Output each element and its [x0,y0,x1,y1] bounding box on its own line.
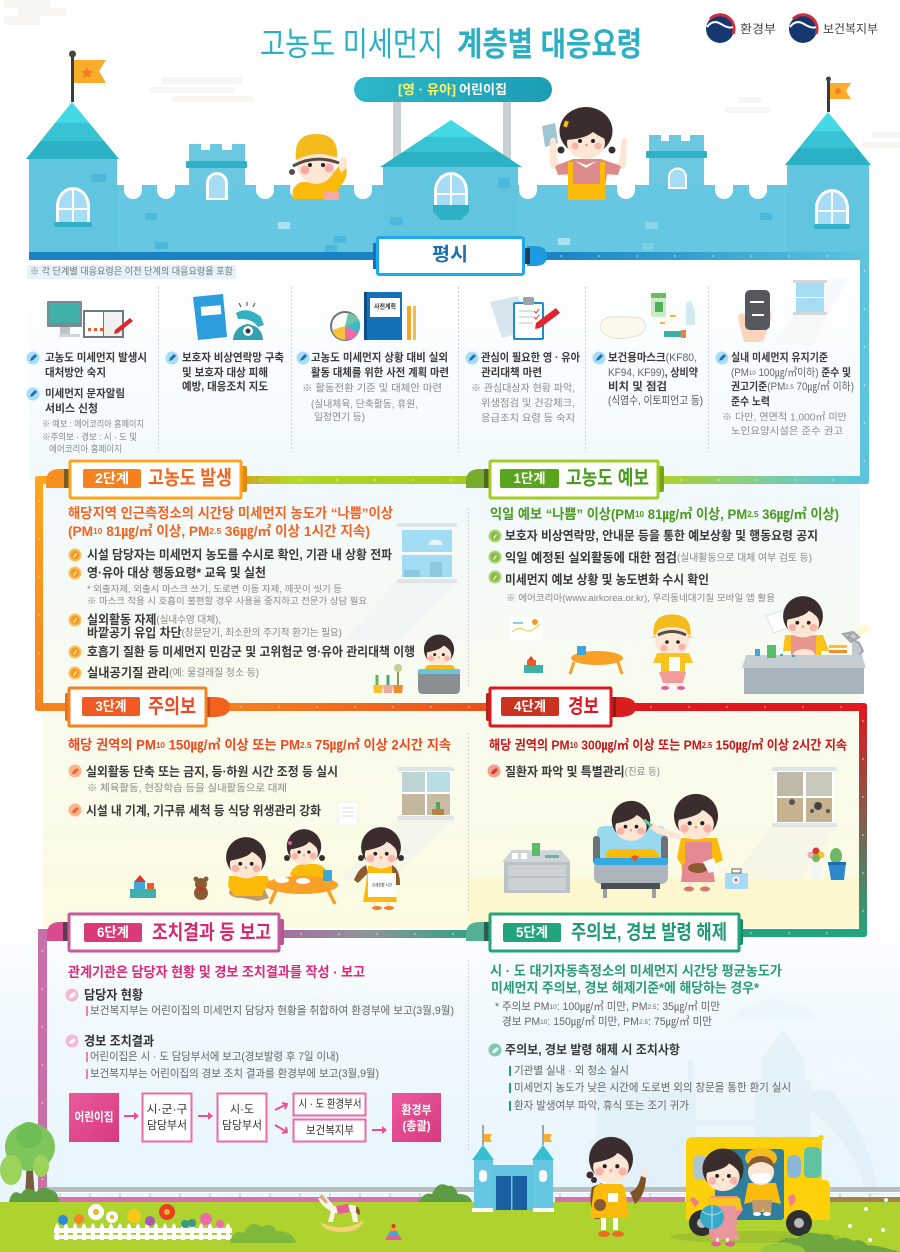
illustration: sick child on bed [593,801,668,898]
stage 2 content: 호흡기 질환 등 미세먼지 민감군 및 고위험군 영·유아 관리대책 이행 [87,644,415,659]
flow box: 시군구 담당부서: 담당부서 [147,1119,187,1132]
window: stage 4 [730,767,837,880]
stage 3 content: 시설 내 기계, 기구류 세척 등 식당 위생관리 강화 [86,803,321,818]
flow box: 보건복지부 [294,1120,366,1142]
flow box: 환경부 총괄: 환경부 [402,1103,432,1117]
column 3 text: 고농도 미세먼지 상황 대비 실외 [311,350,448,364]
flower bed and white fence [54,1204,232,1240]
column 4 text: 응급조치 요령 등 숙지 [481,412,575,424]
icon: clock and plan book: 사전계획 [374,302,396,310]
column 1 text: ※ 예보 : 에어코리아 홈페이지 [42,418,144,429]
illustration: teacher with board [354,827,404,910]
column 1 text [26,351,147,454]
stage 6 content: 담당자 현황 [84,988,143,1002]
background: stage panels [0,484,900,1208]
stage header: 2단계 [46,461,247,498]
illustration: teacher waving [586,1137,648,1237]
column 3 text: (실내체육, 단축활동, 휴원, [311,398,418,410]
column 6 text: 실내 미세먼지 유지기준 [731,350,828,364]
column 2 text: 및 보호자 대상 피해 [182,365,268,379]
right tower [785,76,871,252]
stage 1 content [488,506,839,603]
decorative clouds [4,0,900,148]
column 4 text [466,350,580,424]
stage path lines [29,252,869,1191]
flow box: 시도 담당부서: 담당부서 [222,1119,262,1132]
stage header: 4단계 [486,688,636,726]
stage header: 5단계 [466,914,743,951]
flow arrow 2 [198,1112,213,1120]
flow arrow 4 [372,1126,387,1134]
column 2 text [166,351,284,393]
stage 2 content: 시설 담당자는 미세먼지 농도를 수시로 확인, 기관 내 상황 전파 [87,547,392,562]
column 3 text: ※ 활동전환 기준 및 대체안 마련 [302,382,442,394]
stage 3 content: 실외활동 단축 또는 금지, 등·하원 시간 조정 등 실시 [86,764,338,779]
stage 5 content: * 주의보 PM10: 100㎍/㎥ 미만, PM2.5: 35㎍/㎥ 미만 [495,1000,720,1013]
character: child with yellow hat (top) [289,134,347,200]
stage 2 content: 바깥공기 유입 차단(창문닫기, 최소한의 주기적 환기는 필요) [87,625,342,640]
flow box: 환경부 총괄 [392,1093,441,1142]
flow box: 어린이집: 어린이집 [74,1110,114,1124]
column 4 text: 관리대책 마련 [481,365,542,379]
stage header: 6단계 [47,914,284,951]
castle [26,50,871,252]
stage 5 content: 미세먼지 주의보, 경보 해제기준*에 해당하는 경우* [491,980,760,996]
stage 5 content [488,964,791,1112]
column 5 text: KF94, KF99), 상비약 [608,366,698,379]
column 5 text: 보건용마스크(KF80, [608,351,697,364]
stage 1 content: 익일 예정된 실외활동에 대한 점검(실내활동으로 대체 여부 검토 등) [505,550,812,565]
illustration: girl at table [284,829,328,882]
flow arrows 3 [275,1103,287,1133]
stage 6 content: 보건복지부는 어린이집의 미세먼지 담당자 현황을 취합하여 환경부에 보고(3월,9월) [90,1003,454,1017]
stage header: 1단계: 고농도 예보 [566,466,649,490]
stage header: 1단계: 1단계 [514,471,546,486]
column 3 text: 활동 대체를 위한 사전 계획 마련 [311,365,449,379]
flow box: 보건복지부: 보건복지부 [306,1124,354,1137]
castle wall [117,184,787,252]
stage 5 content: 주의보, 경보 발령 해제 시 조치사항 [505,1042,680,1057]
column 6 text: 노인요양시설은 준수 권고 [731,426,843,438]
flow box: 시도 환경부서 [294,1094,366,1116]
stage 5 content: 기관별 실내 · 외 청소 실시 [514,1064,629,1077]
stage 2 content [68,505,415,680]
ground: fence rail and grass [0,1187,900,1252]
icon: mask and medicine [600,293,695,338]
column 4 text: ※ 관심대상자 현황 파악, [471,382,575,394]
stage header: 5단계: 주의보, 경보 발령 해제 [571,921,727,944]
column 5 text: 비치 및 점검 [608,380,667,393]
flow box: 환경부 총괄: (총괄) [402,1119,430,1133]
window: stage 2 [342,523,457,640]
column 6 text: ※ 다만, 연면적 1,000㎡ 미만 [722,412,847,424]
stage 1 content: 보호자 비상연락망, 안내문 등을 통한 예보상황 및 행동요령 공지 [505,528,818,543]
stage header: 6단계: 6단계 [97,925,129,940]
stage header: 3단계: 주의보 [148,695,196,718]
icon: monitor and book [47,301,133,338]
column dividers [158,287,708,1150]
column 2 text: 보호자 비상연락망 구축 [182,351,284,364]
stage label: 평시: 평시 [432,244,468,266]
column 1 text: 미세먼지 문자알림 [45,386,125,400]
illustration: child with mask in bus [744,1148,781,1216]
stage 2 content: (PM10 81㎍/㎥ 이상, PM2.5 36㎍/㎥ 이상 1시간 지속) [68,523,370,541]
flow box: 시군구 담당부서 [142,1094,192,1142]
note: ※ 각 단계별 대응요령은 이전 단계의 대응요령을 포함 [30,266,233,278]
illustration: child washing hands [418,634,460,694]
illustration: cabinet [502,843,571,893]
reporting flow chart [69,1093,441,1142]
column 2 text: 예방, 대응조치 지도 [182,379,268,393]
title: 계층별 대응요령 [457,26,642,62]
stage 5 content: 미세먼지 농도가 낮은 시간에 도로변 외의 창문을 통한 환기 실시 [514,1081,791,1094]
illustration: teacher at desk [742,596,873,694]
stage 2 content: 영·유아 대상 행동요령* 교육 및 실천 [87,565,266,580]
title [260,26,642,62]
stage 3 content: ※ 체육활동, 현장학습 등을 실내활동으로 대체 [87,782,287,794]
column 5 text [592,351,703,407]
stage 5 content: 시 · 도 대기자동측정소의 미세먼지 시간당 평균농도가 [490,964,783,978]
illustration: flowers and cactus pot [808,848,846,880]
column 1 text: 서비스 신청 [45,401,98,415]
title: 고농도 미세먼지 [260,26,443,62]
stage 6 content: 보건복지부는 어린이집의 경보 조치 결과를 환경부에 보고(3월,9월) [90,1067,379,1080]
stage 2 content: 해당지역 인근측정소의 시간당 미세먼지 농도가 “나쁨”이상 [68,505,393,521]
stage header: 3단계 [65,688,230,726]
bottom right bushes and flowers [760,1198,900,1252]
stage header: 4단계: 4단계 [514,699,546,714]
illustration: teacher with board: 상세현황 시간 [372,882,392,888]
logo: 환경부 [706,15,776,43]
stage header: 1단계 [466,461,664,498]
small castle [472,1125,554,1212]
illustration: nurse teacher [644,794,723,892]
character: girl with document (top) [542,107,627,200]
illustration: table [266,870,338,904]
center tower [380,120,522,252]
icon: clock and plan book [331,292,416,340]
stage header: 4단계: 경보 [568,695,599,718]
faint playground silhouette [262,990,880,1200]
column 6 text [716,350,854,438]
left tower [26,50,119,252]
column 5 text: (식염수, 이토피언고 등) [608,394,703,407]
flow box: 시도 담당부서: 시·도 [230,1103,254,1116]
column 1 text: 대처방안 숙지 [45,365,106,379]
icon: notebook and phone [193,294,264,340]
illustration: school bus [670,1135,840,1243]
flow box: 어린이집 [69,1093,119,1142]
left small tower [186,144,247,200]
illustration: first aid kit [725,869,748,889]
stage 6 content: 관계기관은 담당자 현황 및 경보 조치결과를 작성 · 보고 [68,964,365,980]
pill label: 영 유아 어린이집: [영 · 유아] [398,82,456,97]
tree [0,1122,59,1202]
illustration: map, blocks and table [510,617,623,674]
column 1 text: ※주의보 · 경보 : 시 · 도 및 [42,431,137,442]
icon: clipboard [490,296,560,339]
wall bricks [145,178,772,252]
illustration: boy at table [226,837,272,901]
pill label: 영 유아 어린이집 [354,77,552,102]
stage 4 content: 질환자 파악 및 특별관리(진료 등) [505,765,660,779]
stage 1 content: 미세먼지 예보 상황 및 농도변화 수시 확인 [505,572,709,587]
flow box: 시도 환경부서: 시 · 도 환경부서 [298,1096,362,1110]
stage 2 content: ※ 마스크 착용 시 호흡이 불편할 경우 사용을 중지하고 전문가 상담 필요 [87,595,367,606]
bush behind small castle [418,1184,472,1202]
window: stage 3 [340,767,454,880]
stage 2 content: * 외출자제, 외출시 마스크 쓰기, 도로변 이동 자제, 깨끗이 씻기 등 [87,583,342,594]
stage header: 6단계: 조치결과 등 보고 [152,921,271,944]
stage 4 content [488,738,847,779]
stage 6 content: 어린이집은 시 · 도 담당부서에 보고(경보발령 후 7일 이내) [90,1049,339,1063]
stage 1 content: 익일 예보 “나쁨” 이상(PM10 81㎍/㎥ 이상, PM2.5 36㎍/㎥ 이상) [490,506,839,524]
stage 2 content: 실내공기질 관리(예: 물걸레질 청소 등) [87,665,259,680]
note paper [338,802,358,825]
stage header: 3단계: 3단계 [96,699,126,714]
column 1 text: 고농도 미세먼지 발생시 [45,351,147,364]
stage 3 content: 해당 권역의 PM10 150㎍/㎥ 이상 또는 PM2.5 75㎍/㎥ 이상 2시간 지속 [68,736,451,754]
column 3 text [296,350,449,424]
stage 6 content: 경보 조치결과 [84,1034,154,1048]
castle sign posts [393,102,511,172]
stage 4 content: 해당 권역의 PM10 300㎍/㎥ 이상 또는 PM2.5 150㎍/㎥ 이상 2시간 지속 [489,738,847,754]
stage header: 5단계: 5단계 [516,925,548,940]
column 3 text: 일정연기 등) [314,412,365,424]
bushes [230,1224,296,1243]
illustration: blocks and bear [130,875,208,900]
stage 3 content [68,736,451,818]
right small tower [646,135,707,189]
flow box: 시도 담당부서 [218,1094,266,1142]
column 6 text: 권고기준(PM2.5 70㎍/㎥ 이하) [731,379,854,393]
stage 5 content: 경보 PM10: 150㎍/㎥ 미만, PM2.5: 75㎍/㎥ 미만 [502,1015,712,1028]
column 1 text: 에어코리아 홈페이지 [49,443,122,454]
icon: hand with phone and window [738,279,848,345]
logo: 환경부: 환경부 [740,22,776,36]
stage header: 2단계: 고농도 발생 [148,466,232,490]
column 4 text: 위생점검 및 건강체크, [481,396,575,410]
pill label: 영 유아 어린이집: 어린이집 [459,82,507,97]
illustration: child drinking [651,614,693,690]
column 6 text: 준수 노력 [731,395,770,408]
column 6 text: (PM10 100㎍/㎥이하) 준수 및 [731,365,851,379]
stage 1 content: ※ 에어코리아(www.airkorea.or.kr), 우리동네대기질 모바일 앱 활용 [506,592,775,603]
illustration: girl with balloon ball [700,1148,744,1246]
stage header: 2단계: 2단계 [95,471,129,486]
stage 5 content: 환자 발생여부 파악, 휴식 또는 조기 귀가 [514,1099,689,1112]
stage 6 content [66,964,454,1080]
stage 2 content: 실외활동 자제(실내수영 대체), [87,612,221,627]
stacking toy [385,1224,402,1240]
logo: 보건복지부 [789,15,878,43]
flow box: 시군구 담당부서: 시·군·구 [146,1103,188,1116]
rocking horse [318,1194,364,1232]
illustration: plants [373,664,403,693]
stage label: 평시 [373,238,547,274]
column 4 text: 관심이 필요한 영 · 유아 [481,350,580,364]
logo: 보건복지부: 보건복지부 [823,22,878,36]
flow arrow 1 [124,1112,139,1120]
